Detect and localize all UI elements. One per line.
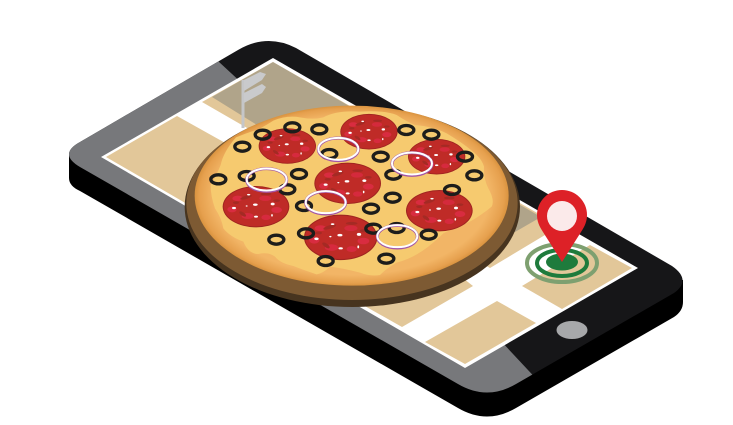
signpost — [242, 72, 266, 128]
isometric pizza delivery illustration — [69, 41, 683, 416]
map block bottom — [425, 301, 536, 364]
map block right — [522, 245, 632, 309]
phone side edge — [69, 154, 683, 416]
location pin — [537, 190, 587, 262]
phone top face — [69, 41, 683, 392]
home button — [556, 321, 588, 339]
onion rings — [247, 138, 432, 248]
pepperoni slices — [223, 114, 473, 260]
pizza board — [185, 106, 520, 307]
map block left — [106, 116, 245, 204]
map block lower middle — [340, 260, 473, 327]
building shadow on map — [212, 62, 541, 232]
pizza — [185, 106, 520, 307]
olives — [211, 123, 482, 265]
crust — [195, 106, 509, 286]
glare on phone face — [69, 62, 532, 392]
location rings — [527, 244, 597, 282]
map block top — [202, 62, 560, 268]
cheese — [211, 111, 493, 275]
screen — [101, 58, 638, 368]
map blocks — [106, 62, 632, 364]
